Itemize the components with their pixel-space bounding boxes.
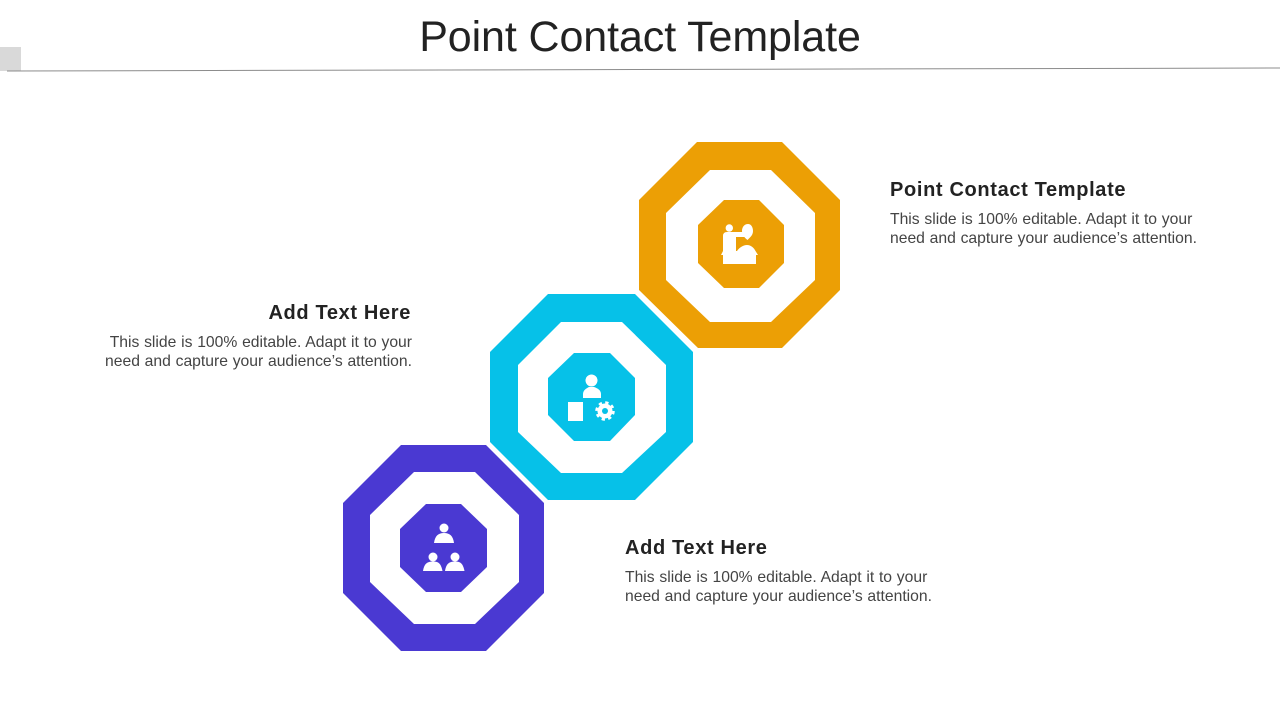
text block: bottom right xyxy=(625,537,932,605)
icon: person, document and gear xyxy=(568,374,614,421)
octagon: purple xyxy=(343,445,544,651)
body text xyxy=(105,334,412,370)
text block: top right xyxy=(890,179,1197,247)
text block: middle left xyxy=(105,302,412,370)
octagon: cyan xyxy=(490,294,693,500)
body text: need and capture your audience’s attention. xyxy=(625,588,932,605)
body text xyxy=(625,569,932,605)
header accent square xyxy=(0,47,21,71)
octagon: orange xyxy=(639,142,840,348)
body text: This slide is 100% editable. Adapt it to your xyxy=(890,211,1192,228)
heading: Add Text Here xyxy=(268,302,411,324)
body text: This slide is 100% editable. Adapt it to your xyxy=(110,334,412,351)
icon: person with balloon at desk xyxy=(721,224,758,264)
header rule xyxy=(7,68,1280,72)
body text: This slide is 100% editable. Adapt it to your xyxy=(625,569,927,586)
heading: Point Contact Template xyxy=(890,179,1126,201)
title: Point Contact Template xyxy=(419,13,861,61)
heading: Add Text Here xyxy=(625,537,768,559)
body text: need and capture your audience’s attention. xyxy=(890,230,1197,247)
body text xyxy=(890,211,1197,247)
icon: three people xyxy=(423,524,464,571)
body text: need and capture your audience’s attention. xyxy=(105,353,412,370)
